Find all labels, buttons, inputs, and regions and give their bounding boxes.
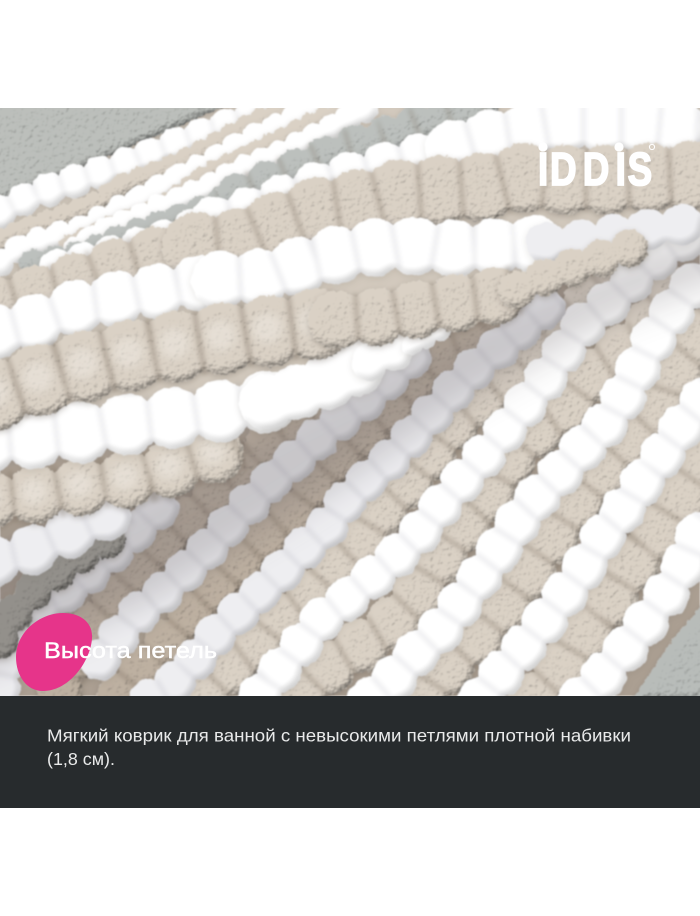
logo: IDDIS xyxy=(538,142,655,195)
fold: far rows xyxy=(0,106,700,267)
lower mat section: gray corner xyxy=(632,604,700,696)
shadow under the fold xyxy=(0,230,700,680)
lower mat section: diagonal white rows xyxy=(0,235,700,700)
lower mat section: diagonal beige rows xyxy=(60,250,700,700)
fold: beige lower row xyxy=(0,437,250,500)
caption text xyxy=(47,726,631,769)
logo: IDDIS: I xyxy=(538,143,548,195)
fold: big beige row xyxy=(0,248,630,395)
fold: white band xyxy=(0,330,445,442)
logo: IDDIS: D xyxy=(583,143,609,195)
logo: IDDIS: I xyxy=(616,143,626,195)
badge: pink blob and heading: Высота петель xyxy=(44,638,217,663)
dark caption band xyxy=(0,696,700,808)
fold: beige front row xyxy=(0,175,700,305)
photo: bath mat with pile loops xyxy=(0,100,700,700)
badge: pink blob and heading xyxy=(16,613,217,691)
gray field at the top left xyxy=(0,108,230,197)
caption text: (1,8 см). xyxy=(47,749,115,769)
logo: IDDIS: S xyxy=(628,143,652,195)
upper fold base xyxy=(0,108,700,414)
fold: white lower row xyxy=(0,505,125,562)
fold: lower dark gray row xyxy=(0,530,125,640)
logo: IDDIS: D xyxy=(550,143,577,195)
caption text: Мягкий коврик для ванной с невысокими петлями плотной набивки xyxy=(47,726,631,746)
fold: white front row xyxy=(0,220,700,332)
